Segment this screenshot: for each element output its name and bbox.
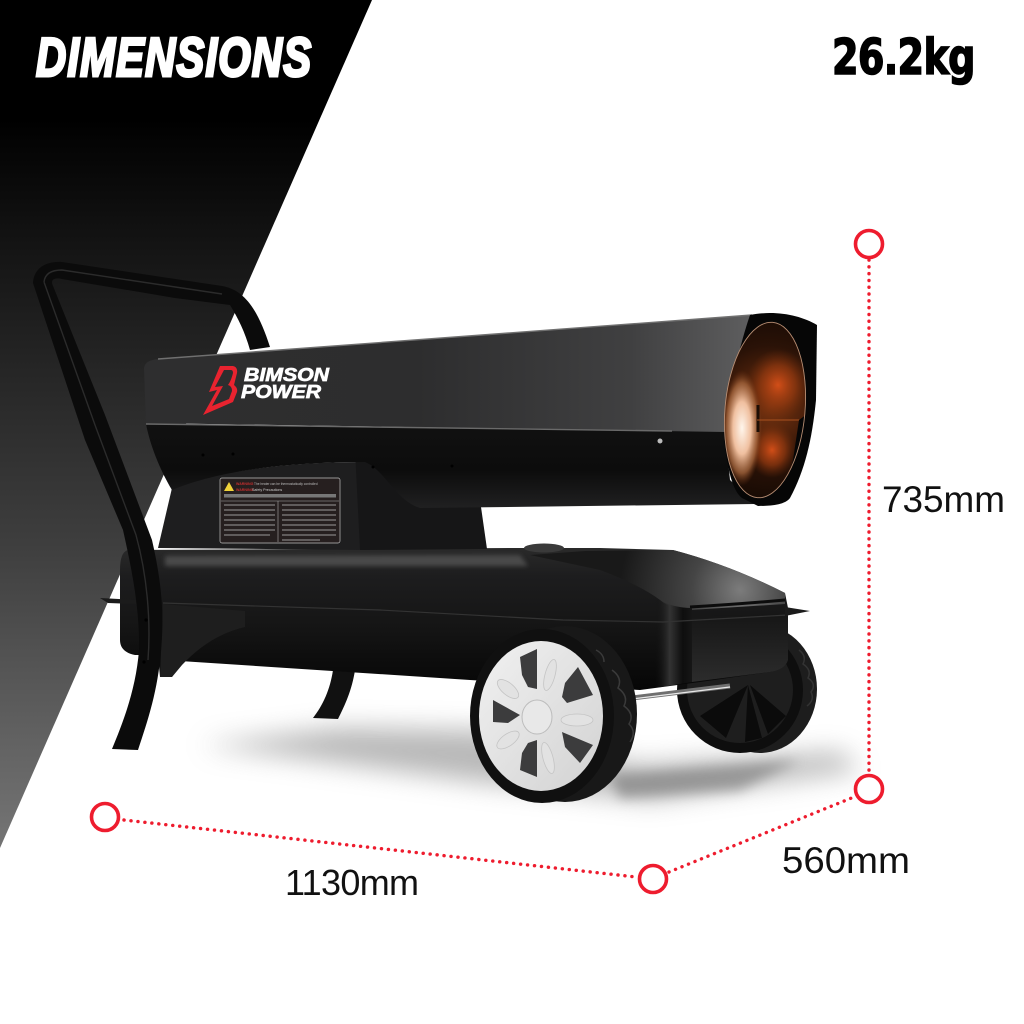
height label: 735mm (882, 479, 1005, 520)
black diagonal background panel (0, 0, 372, 848)
front cowl (724, 313, 817, 506)
rear wheel (677, 625, 817, 753)
brand logo: POWER (241, 382, 321, 402)
height dimension line (856, 230, 882, 802)
barrel rivets (202, 452, 454, 468)
wheel hub (479, 641, 603, 791)
title: DIMENSIONS (36, 28, 311, 88)
copper reflector opening (724, 322, 806, 498)
push handle (33, 262, 270, 750)
tank side rims (100, 598, 136, 604)
tank rim lines (163, 603, 788, 622)
tank highlight band (165, 555, 528, 566)
brand logo (203, 365, 330, 415)
weight value: 26.2kg (832, 29, 976, 86)
icon: red lightning B (203, 366, 237, 415)
width label: 560mm (782, 840, 910, 881)
warning label: Safety Precautions (252, 488, 282, 492)
tank corner crease (655, 598, 692, 688)
front bracket (160, 604, 245, 677)
heater barrel lower shell (146, 424, 756, 508)
fuel tank (100, 544, 810, 690)
filler cap (524, 544, 564, 552)
front wheel (470, 626, 637, 803)
warning label: WARNING (236, 482, 254, 486)
rear leg (313, 670, 355, 719)
base support housing (158, 450, 487, 550)
embossed ovals (494, 658, 593, 775)
width dimension line (669, 797, 854, 872)
tank lid (530, 550, 785, 610)
length dimension line (92, 804, 666, 892)
tank lower box (692, 614, 788, 682)
heater product illustration (33, 262, 817, 803)
floor shadow (200, 728, 860, 800)
logo wordmark: BIMSON (244, 365, 330, 385)
warning label (220, 478, 340, 543)
heater barrel upper shell (144, 315, 752, 432)
warning label: WARNING (236, 488, 254, 492)
axle (632, 686, 730, 698)
wheel tread (493, 626, 637, 802)
warning label: The heater can be thermostatically controlled (254, 482, 318, 486)
length label: 1130mm (285, 862, 419, 903)
